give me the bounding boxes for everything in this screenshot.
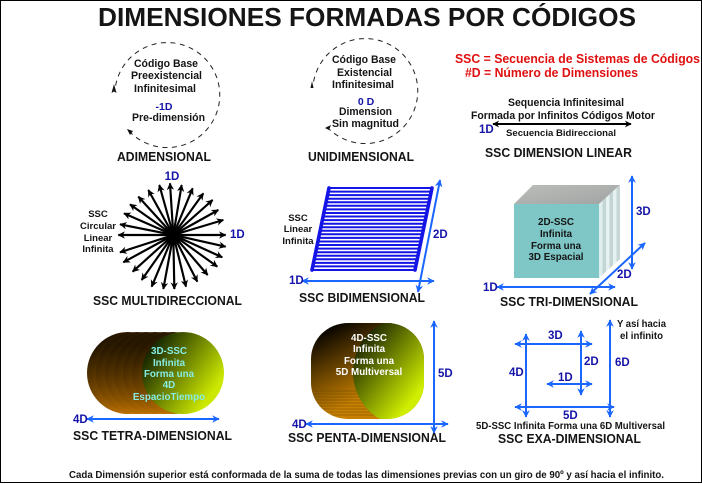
heading: multidireccional: SSC MULTIDIRECCIONAL	[93, 294, 242, 308]
arrow: 5D	[433, 321, 435, 433]
side text: Infinita	[282, 236, 314, 247]
heading: tri-dimensional: SSC TRI-DIMENSIONAL	[500, 295, 638, 309]
unidimensional text: Infinitesimal	[332, 79, 394, 91]
arrow: 1D	[302, 280, 434, 282]
description: Formada por Infinitos Códigos Motor	[471, 110, 656, 122]
ellipse text: Infinita	[153, 358, 186, 369]
shape text: Forma una	[344, 356, 395, 367]
unidimensional text: Dimension	[339, 106, 392, 118]
dashed circle	[313, 39, 418, 144]
side text	[80, 209, 116, 255]
legend: #D = Número de Dimensiones	[465, 66, 638, 80]
panel: tri-dimensional	[483, 176, 651, 309]
panel: bidimensional	[282, 180, 448, 305]
side text: Linear	[284, 224, 313, 235]
side text: SSC	[288, 213, 308, 224]
arrow: bidirectional sequence	[493, 123, 631, 125]
dimension labels: 1D	[558, 372, 573, 384]
panel: penta-dimensional	[288, 319, 453, 445]
arrow: 3D	[631, 176, 633, 269]
dimension labels: 2D	[584, 356, 599, 368]
cube text: Infinita	[540, 229, 573, 240]
adimensional text: Pre-dimensión	[132, 112, 205, 124]
panel: exa-dimensional	[476, 318, 666, 446]
heading: penta-dimensional: SSC PENTA-DIMENSIONAL	[288, 431, 446, 445]
heading: tetra-dimensional: SSC TETRA-DIMENSIONAL	[73, 429, 232, 443]
ellipse text: EspacioTiempo	[133, 392, 205, 403]
shape text	[336, 333, 402, 378]
label 1D right: 1D	[230, 229, 245, 241]
footer note: Cada Dimensión superior está conformada de la suma de todas las dimensiones previas con un giro de 90º y así hacia el infinito.	[69, 470, 664, 481]
heading: bidimensional: SSC BIDIMENSIONAL	[299, 291, 425, 305]
label 1D: 1D	[483, 282, 498, 294]
cube text	[528, 217, 584, 263]
dimension labels: 5D	[563, 410, 578, 422]
panel: dimension linear	[471, 97, 656, 160]
adimensional text: Infinitesimal	[134, 83, 196, 95]
cube text: 3D Espacial	[528, 252, 584, 263]
label 3D: 3D	[636, 206, 651, 218]
panel: unidimensional	[308, 39, 418, 164]
label 5D: 5D	[438, 368, 453, 380]
arrow: 2D	[590, 243, 645, 294]
dimension labels: 3D	[548, 330, 563, 342]
arrow: 2D	[418, 180, 440, 292]
adimensional text: Código Base	[134, 58, 198, 70]
dashed circle	[115, 43, 220, 148]
ellipse text: 3D-SSC	[151, 346, 187, 357]
label 2D: 2D	[433, 229, 448, 241]
heading: adimensional: ADIMENSIONAL	[117, 150, 211, 164]
icon: arrowheads	[112, 84, 133, 135]
legend: SSC = Secuencia de Sistemas de Códigos	[455, 52, 700, 66]
heading: linear: SSC DIMENSION LINEAR	[485, 146, 632, 160]
icon: stacked shapes	[311, 323, 424, 419]
note: towards infinity: el infinito	[620, 330, 663, 342]
label 4D: 4D	[73, 414, 88, 426]
shape text: 4D-SSC	[351, 333, 387, 344]
cube text: 2D-SSC	[538, 217, 574, 228]
panel: adimensional	[112, 43, 220, 164]
chart: radial arrows	[118, 183, 226, 289]
side text: Circular	[80, 221, 116, 232]
ellipse text: Forma una	[144, 369, 195, 380]
dimension labels	[509, 330, 630, 422]
chart: parallel lines	[312, 188, 432, 270]
icon: cube	[514, 185, 620, 278]
panel: tetra-dimensional	[73, 332, 232, 443]
icon: arrowheads	[310, 81, 331, 130]
label 1D: 1D	[479, 124, 494, 136]
shape text: 5D Multiversal	[336, 367, 402, 378]
description	[471, 97, 656, 122]
unidimensional text	[332, 54, 399, 130]
side text: Linear	[84, 233, 113, 244]
arrow: 4D	[306, 423, 448, 425]
arrow: 4D	[87, 418, 219, 420]
label 2D: 2D	[617, 269, 632, 281]
label 4D: 4D	[292, 419, 307, 431]
adimensional text	[131, 58, 205, 124]
side text	[282, 213, 314, 247]
arrow: 1D	[497, 286, 615, 288]
legend	[455, 52, 700, 80]
side text: Infinita	[82, 244, 114, 255]
panel: multidireccional	[80, 171, 245, 308]
title: DIMENSIONES FORMADAS POR CÓDIGOS	[98, 2, 636, 32]
adimensional text: -1D	[156, 101, 173, 113]
ellipse text	[133, 346, 205, 403]
description: Sequencia Infinitesimal	[508, 97, 624, 109]
label 1D top: 1D	[165, 171, 179, 183]
shape text: Infinita	[353, 344, 386, 355]
unidimensional text: Sin magnitud	[332, 118, 399, 130]
heading: exa-dimensional: SSC EXA-DIMENSIONAL	[498, 432, 641, 446]
dimension labels: 4D	[509, 367, 524, 379]
cube text: Forma una	[531, 241, 582, 252]
caption: Secuencia Bidireccional	[506, 128, 616, 139]
unidimensional text: Existencial	[337, 67, 392, 79]
note: towards infinity: Y así hacia	[617, 318, 666, 330]
side text: SSC	[88, 209, 108, 220]
unidimensional text: Código Base	[332, 54, 396, 66]
note: towards infinity	[617, 318, 666, 342]
caption: 5D-SSC Infinita Forma una 6D Multiversal	[476, 420, 665, 432]
adimensional text: Preexistencial	[131, 70, 202, 82]
icon: stacked ellipses	[87, 332, 224, 414]
ellipse text: 4D	[163, 380, 175, 391]
unidimensional text: 0 D	[358, 96, 375, 108]
dimension labels: 6D	[615, 357, 630, 369]
label 1D: 1D	[289, 275, 304, 287]
chart: dimension arrows	[515, 320, 614, 417]
heading: unidimensional: UNIDIMENSIONAL	[308, 150, 414, 164]
